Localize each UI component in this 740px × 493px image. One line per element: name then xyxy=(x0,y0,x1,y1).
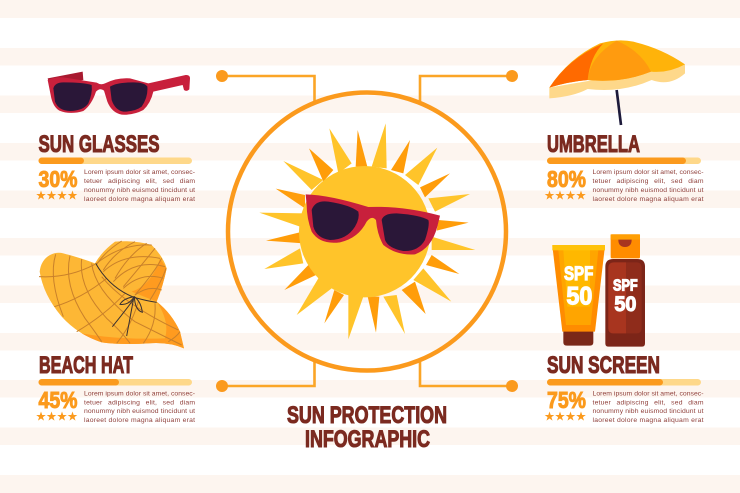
percentage: 30% xyxy=(38,166,78,192)
body text: laoreet dolore magna aliquam erat xyxy=(592,417,704,424)
body text: nonummy nibh euismod tincidunt ut xyxy=(592,187,704,194)
connector: top right xyxy=(420,70,518,101)
heading: SUN SCREEN xyxy=(547,352,660,379)
percentage: 80% xyxy=(547,166,586,192)
body text xyxy=(84,390,195,424)
panel: sun screen xyxy=(545,234,704,424)
body text: tetuer adipiscing elit, sed diam xyxy=(592,178,704,185)
star rating xyxy=(545,411,586,421)
body text xyxy=(592,169,704,203)
body text: tetuer adipiscing elit, sed diam xyxy=(84,178,195,185)
body text xyxy=(84,169,195,203)
panel: umbrella xyxy=(545,40,704,203)
icon: sunscreen tube and bottle: 50 xyxy=(614,292,636,316)
star rating xyxy=(545,190,586,200)
icon: sunscreen tube and bottle xyxy=(552,234,645,347)
percentage: 75% xyxy=(547,387,586,413)
star rating xyxy=(36,190,77,200)
body text: nonummy nibh euismod tincidunt ut xyxy=(592,408,704,415)
body text: laoreet dolore magna aliquam erat xyxy=(592,196,704,203)
percentage: 45% xyxy=(38,387,78,413)
panel: beach hat xyxy=(36,241,195,424)
body text: nonummy nibh euismod tincidunt ut xyxy=(84,187,195,194)
body text: Lorem ipsum dolor sit amet, consec- xyxy=(84,169,195,176)
progress bar xyxy=(38,379,192,386)
progress bar xyxy=(38,158,192,164)
body text: laoreet dolore magna aliquam erat xyxy=(84,417,195,424)
progress bar xyxy=(547,379,701,386)
title: SUN PROTECTION xyxy=(287,402,447,429)
panel: sun glasses xyxy=(36,72,195,203)
connector: bottom left xyxy=(216,362,314,392)
body text xyxy=(592,390,704,424)
body text: nonummy nibh euismod tincidunt ut xyxy=(84,408,195,415)
connector: top left xyxy=(216,70,314,101)
body text: tetuer adipiscing elit, sed diam xyxy=(84,400,195,406)
title xyxy=(287,402,447,453)
body text: tetuer adipiscing elit, sed diam xyxy=(592,400,704,406)
central ring xyxy=(228,92,506,370)
icon: sunscreen tube and bottle: SPF xyxy=(564,264,593,285)
star rating xyxy=(36,411,77,421)
icon: beach hat xyxy=(39,241,184,348)
icon: sunglasses xyxy=(48,72,190,115)
body text: Lorem ipsum dolor sit amet, consec- xyxy=(84,390,195,398)
icon: sunscreen tube and bottle: 50 xyxy=(566,282,592,310)
heading: UMBRELLA xyxy=(547,131,640,158)
heading: SUN GLASSES xyxy=(38,131,160,158)
title: INFOGRAPHIC xyxy=(305,426,430,453)
connector: bottom right xyxy=(420,362,518,392)
body text: Lorem ipsum dolor sit amet, consec- xyxy=(592,169,704,176)
heading: BEACH HAT xyxy=(39,352,133,379)
icon: sunscreen tube and bottle: SPF xyxy=(613,277,638,294)
progress bar xyxy=(547,158,701,164)
icon: umbrella xyxy=(549,40,685,125)
icon: sun wearing sunglasses xyxy=(259,123,475,339)
body text: laoreet dolore magna aliquam erat xyxy=(84,196,195,203)
body text: Lorem ipsum dolor sit amet, consec- xyxy=(592,390,704,398)
